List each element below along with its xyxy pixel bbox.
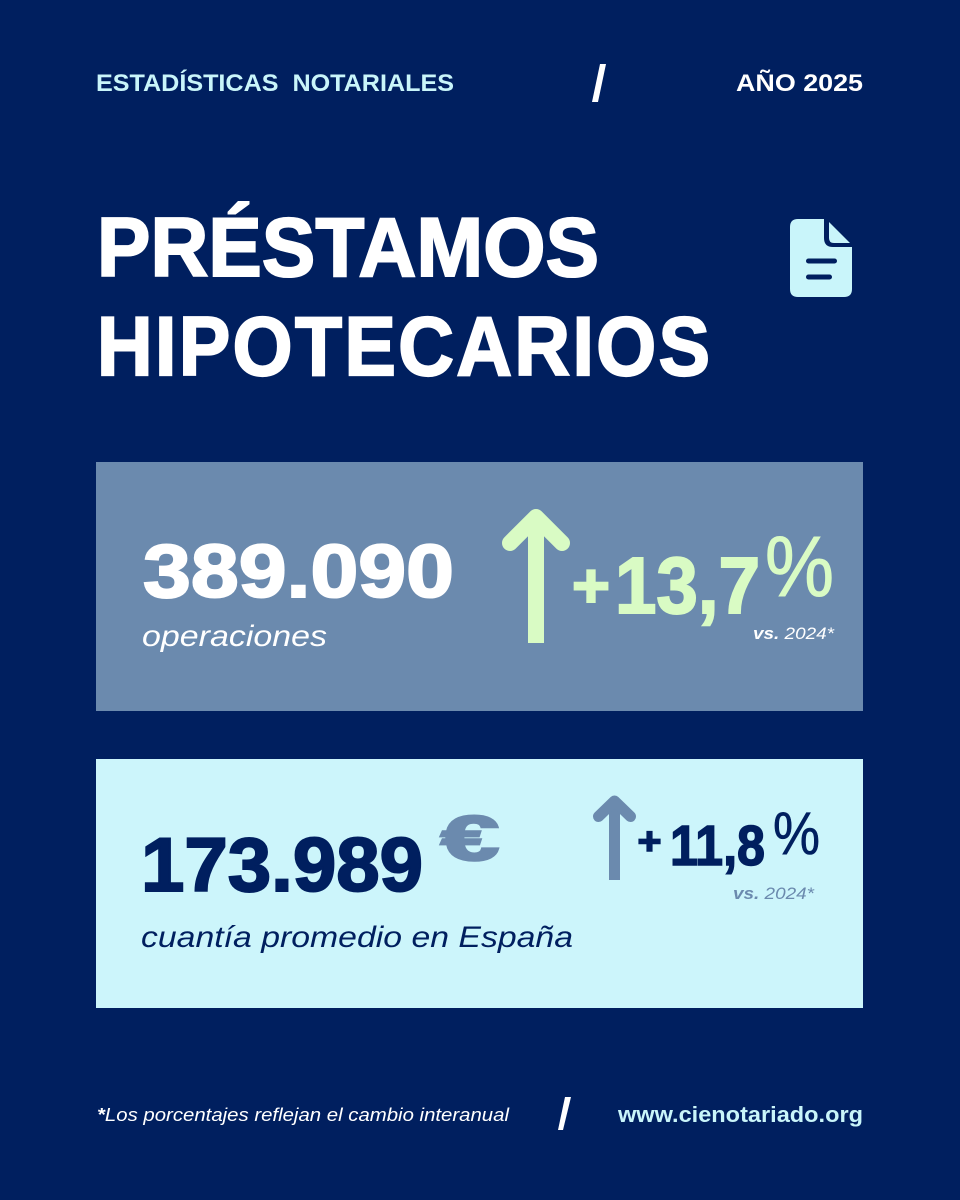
title: HIPOTECARIOS	[97, 299, 710, 393]
operations change: 13,7	[615, 541, 760, 630]
operations label: operaciones	[142, 620, 327, 653]
operations comparison note: vs. 2024*	[753, 624, 836, 643]
header label: ESTADÍSTICAS NOTARIALES	[96, 69, 454, 97]
operations value: 389.090	[143, 529, 454, 613]
operations percent sign: %	[765, 520, 834, 615]
amount change	[638, 814, 765, 878]
footer note: *Los porcentajes reflejan el cambio interanual	[97, 1105, 510, 1125]
header slash	[592, 64, 606, 102]
title	[97, 202, 710, 393]
panel: cuantía	[96, 759, 863, 1008]
footer website: www.cienotariado.org	[617, 1102, 863, 1127]
amount value: 173.989	[141, 823, 423, 908]
operations change: +	[572, 552, 610, 621]
amount comparison note: vs. 2024*	[733, 884, 816, 903]
amount change: 11,8	[670, 814, 765, 878]
amount label: cuantía promedio en España	[141, 921, 573, 954]
footer slash	[558, 1097, 571, 1130]
title: PRÉSTAMOS	[97, 202, 599, 294]
amount percent sign: %	[773, 800, 820, 867]
header year: AÑO 2025	[736, 69, 863, 97]
panel: operaciones	[96, 462, 863, 711]
euro sign: €	[441, 804, 499, 874]
icon: document	[790, 219, 852, 297]
icon: up arrow green	[510, 517, 562, 643]
amount change: +	[638, 821, 662, 863]
icon: up arrow blue	[598, 801, 630, 880]
